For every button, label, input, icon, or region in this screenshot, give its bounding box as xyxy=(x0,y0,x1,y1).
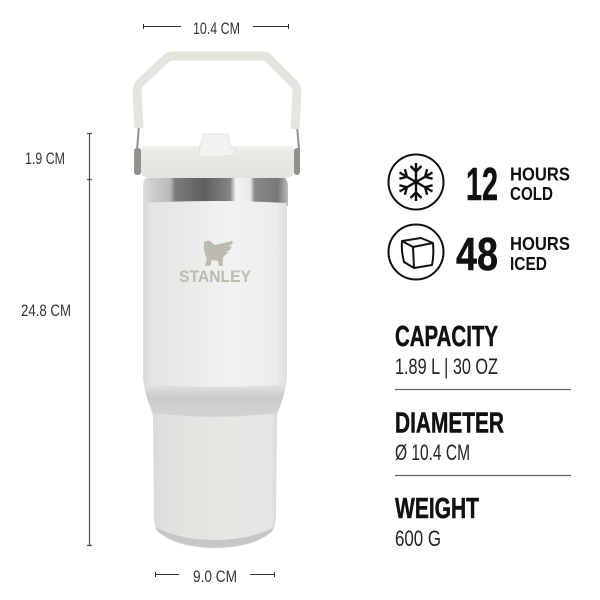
label: 1.9 cm: 1.9 CM xyxy=(25,149,65,168)
lid hinge right xyxy=(294,148,300,175)
label: 24.8 cm: 24.8 CM xyxy=(21,301,71,320)
spec: weight xyxy=(395,493,479,551)
icon: snowflake xyxy=(388,154,444,210)
spec: diameter: Ø 10.4 CM xyxy=(395,440,470,465)
straw spout xyxy=(198,134,235,157)
icon: ice cube xyxy=(388,224,444,280)
lower body xyxy=(153,413,277,548)
base shadow xyxy=(155,527,274,548)
stat: 12 hours cold: COLD xyxy=(510,184,553,204)
handle wires xyxy=(137,125,299,150)
lid hinge left xyxy=(134,148,141,175)
stat: 48 hours iced: 48 xyxy=(456,228,498,280)
stat: 48 hours iced: ICED xyxy=(510,254,547,274)
stat: 12 hours cold: 12 xyxy=(466,158,498,210)
spec: capacity xyxy=(395,321,498,379)
top width dimension xyxy=(144,19,289,38)
carry handle xyxy=(137,56,297,129)
top width dimension: 10.4 CM xyxy=(193,19,240,38)
spec: diameter: DIAMETER xyxy=(395,408,504,440)
upper body xyxy=(143,201,287,418)
grey transition band xyxy=(144,384,286,417)
tumbler illustration xyxy=(134,56,300,548)
spec: capacity: CAPACITY xyxy=(395,321,498,353)
height dimension line xyxy=(87,133,92,546)
spec: weight: WEIGHT xyxy=(395,493,479,525)
bottom width dimension: 9.0 CM xyxy=(193,567,237,586)
stat: 48 hours iced: HOURS xyxy=(510,234,570,254)
bottom width dimension xyxy=(156,567,275,586)
stat: 12 hours cold xyxy=(466,158,570,210)
logo wordmark: STANLEY xyxy=(179,267,252,286)
spec: diameter xyxy=(395,408,504,465)
divider xyxy=(395,388,571,390)
stat: 12 hours cold: HOURS xyxy=(510,164,570,184)
spec: capacity: 1.89 L | 30 OZ xyxy=(395,354,498,379)
spec: weight: 600 G xyxy=(395,526,441,551)
stanley bear logo xyxy=(179,241,252,286)
stat: 48 hours iced xyxy=(456,228,570,280)
divider xyxy=(395,474,571,476)
lid xyxy=(140,146,295,178)
stainless steel collar xyxy=(143,178,288,206)
